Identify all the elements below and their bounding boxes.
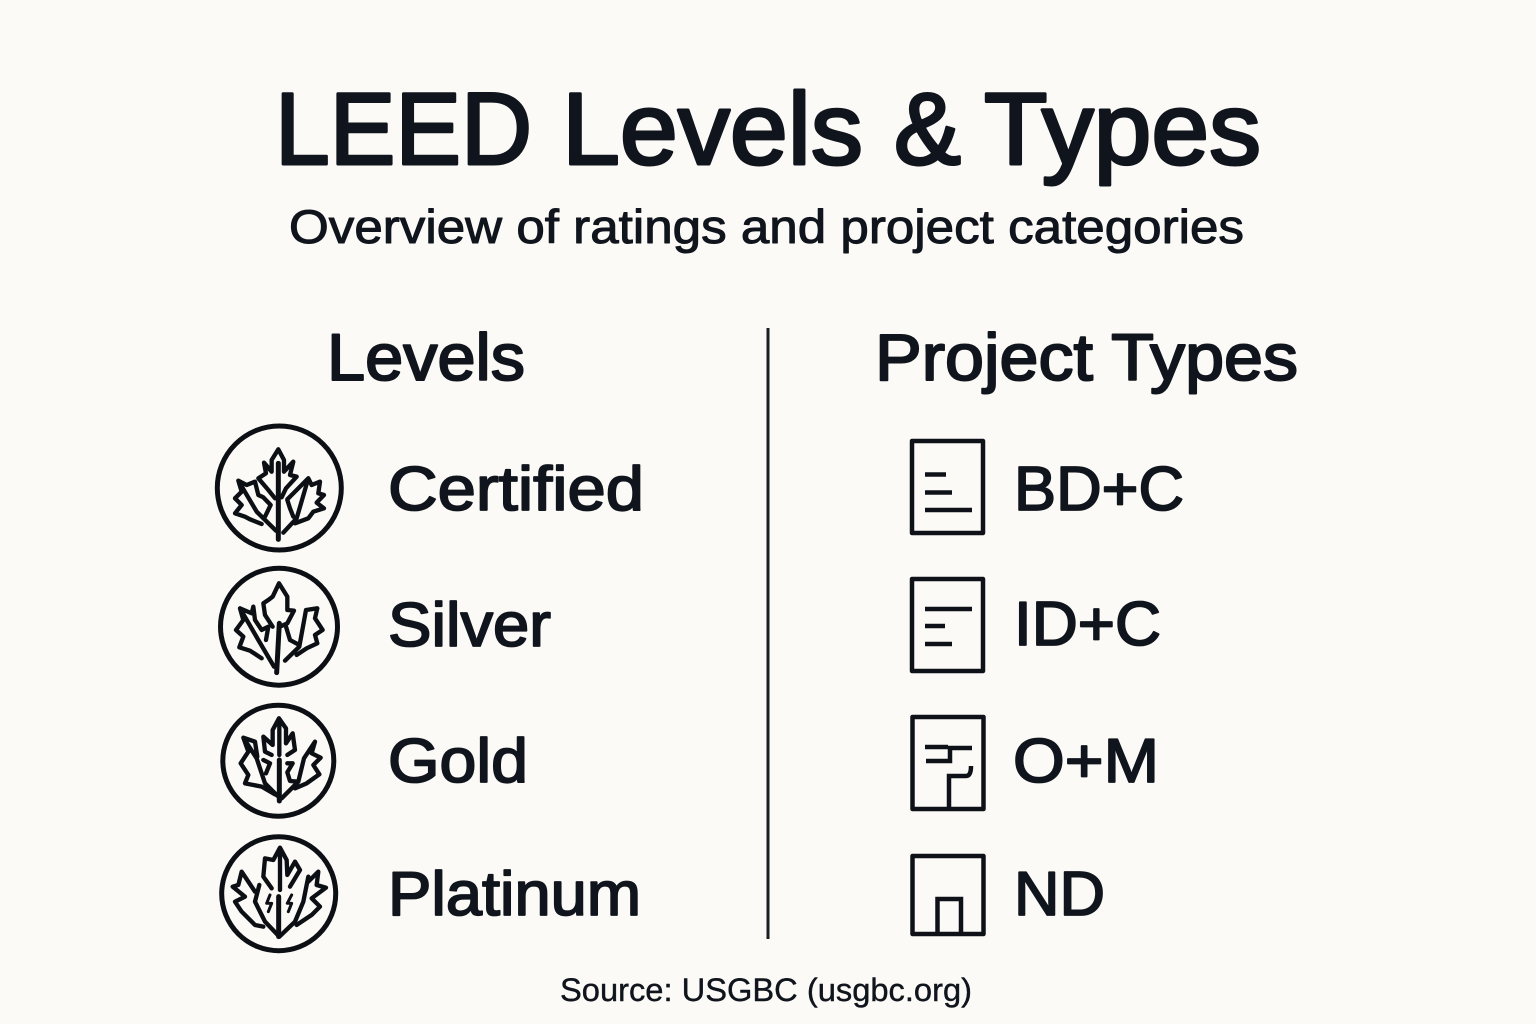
label: certified: Certified bbox=[388, 455, 644, 524]
icon: platinum leaf badge bbox=[222, 837, 336, 951]
icon: gold leaf badge bbox=[223, 705, 334, 816]
source note: Source: USGBC (usgbc.org) bbox=[560, 972, 972, 1008]
icon: ND building bbox=[912, 856, 984, 934]
icon: ID+C document bbox=[912, 579, 983, 671]
icon: BD+C document bbox=[912, 441, 983, 533]
title: Types bbox=[984, 72, 1261, 186]
label: ID+C: ID+C bbox=[1014, 590, 1161, 659]
label: gold: Gold bbox=[388, 727, 528, 796]
label: silver: Silver bbox=[388, 591, 551, 660]
title: Levels bbox=[562, 72, 863, 186]
panel: project types bbox=[875, 320, 1298, 934]
label: ND: ND bbox=[1014, 860, 1105, 929]
icon: silver leaf badge bbox=[220, 568, 338, 685]
title: & bbox=[894, 72, 961, 186]
title: LEED bbox=[275, 72, 532, 186]
subtitle: Overview of ratings and project categories bbox=[289, 200, 1244, 253]
label: BD+C: BD+C bbox=[1014, 455, 1184, 524]
center divider bbox=[766, 328, 770, 939]
heading: project types: Project Types bbox=[875, 320, 1298, 394]
label: platinum: Platinum bbox=[388, 860, 641, 929]
label: O+M: O+M bbox=[1013, 727, 1159, 796]
title bbox=[275, 72, 1261, 186]
panel: levels bbox=[217, 320, 644, 951]
icon: certified leaf badge bbox=[217, 426, 341, 550]
icon: O+M floor plan bbox=[912, 717, 984, 809]
heading: levels: Levels bbox=[327, 320, 525, 394]
